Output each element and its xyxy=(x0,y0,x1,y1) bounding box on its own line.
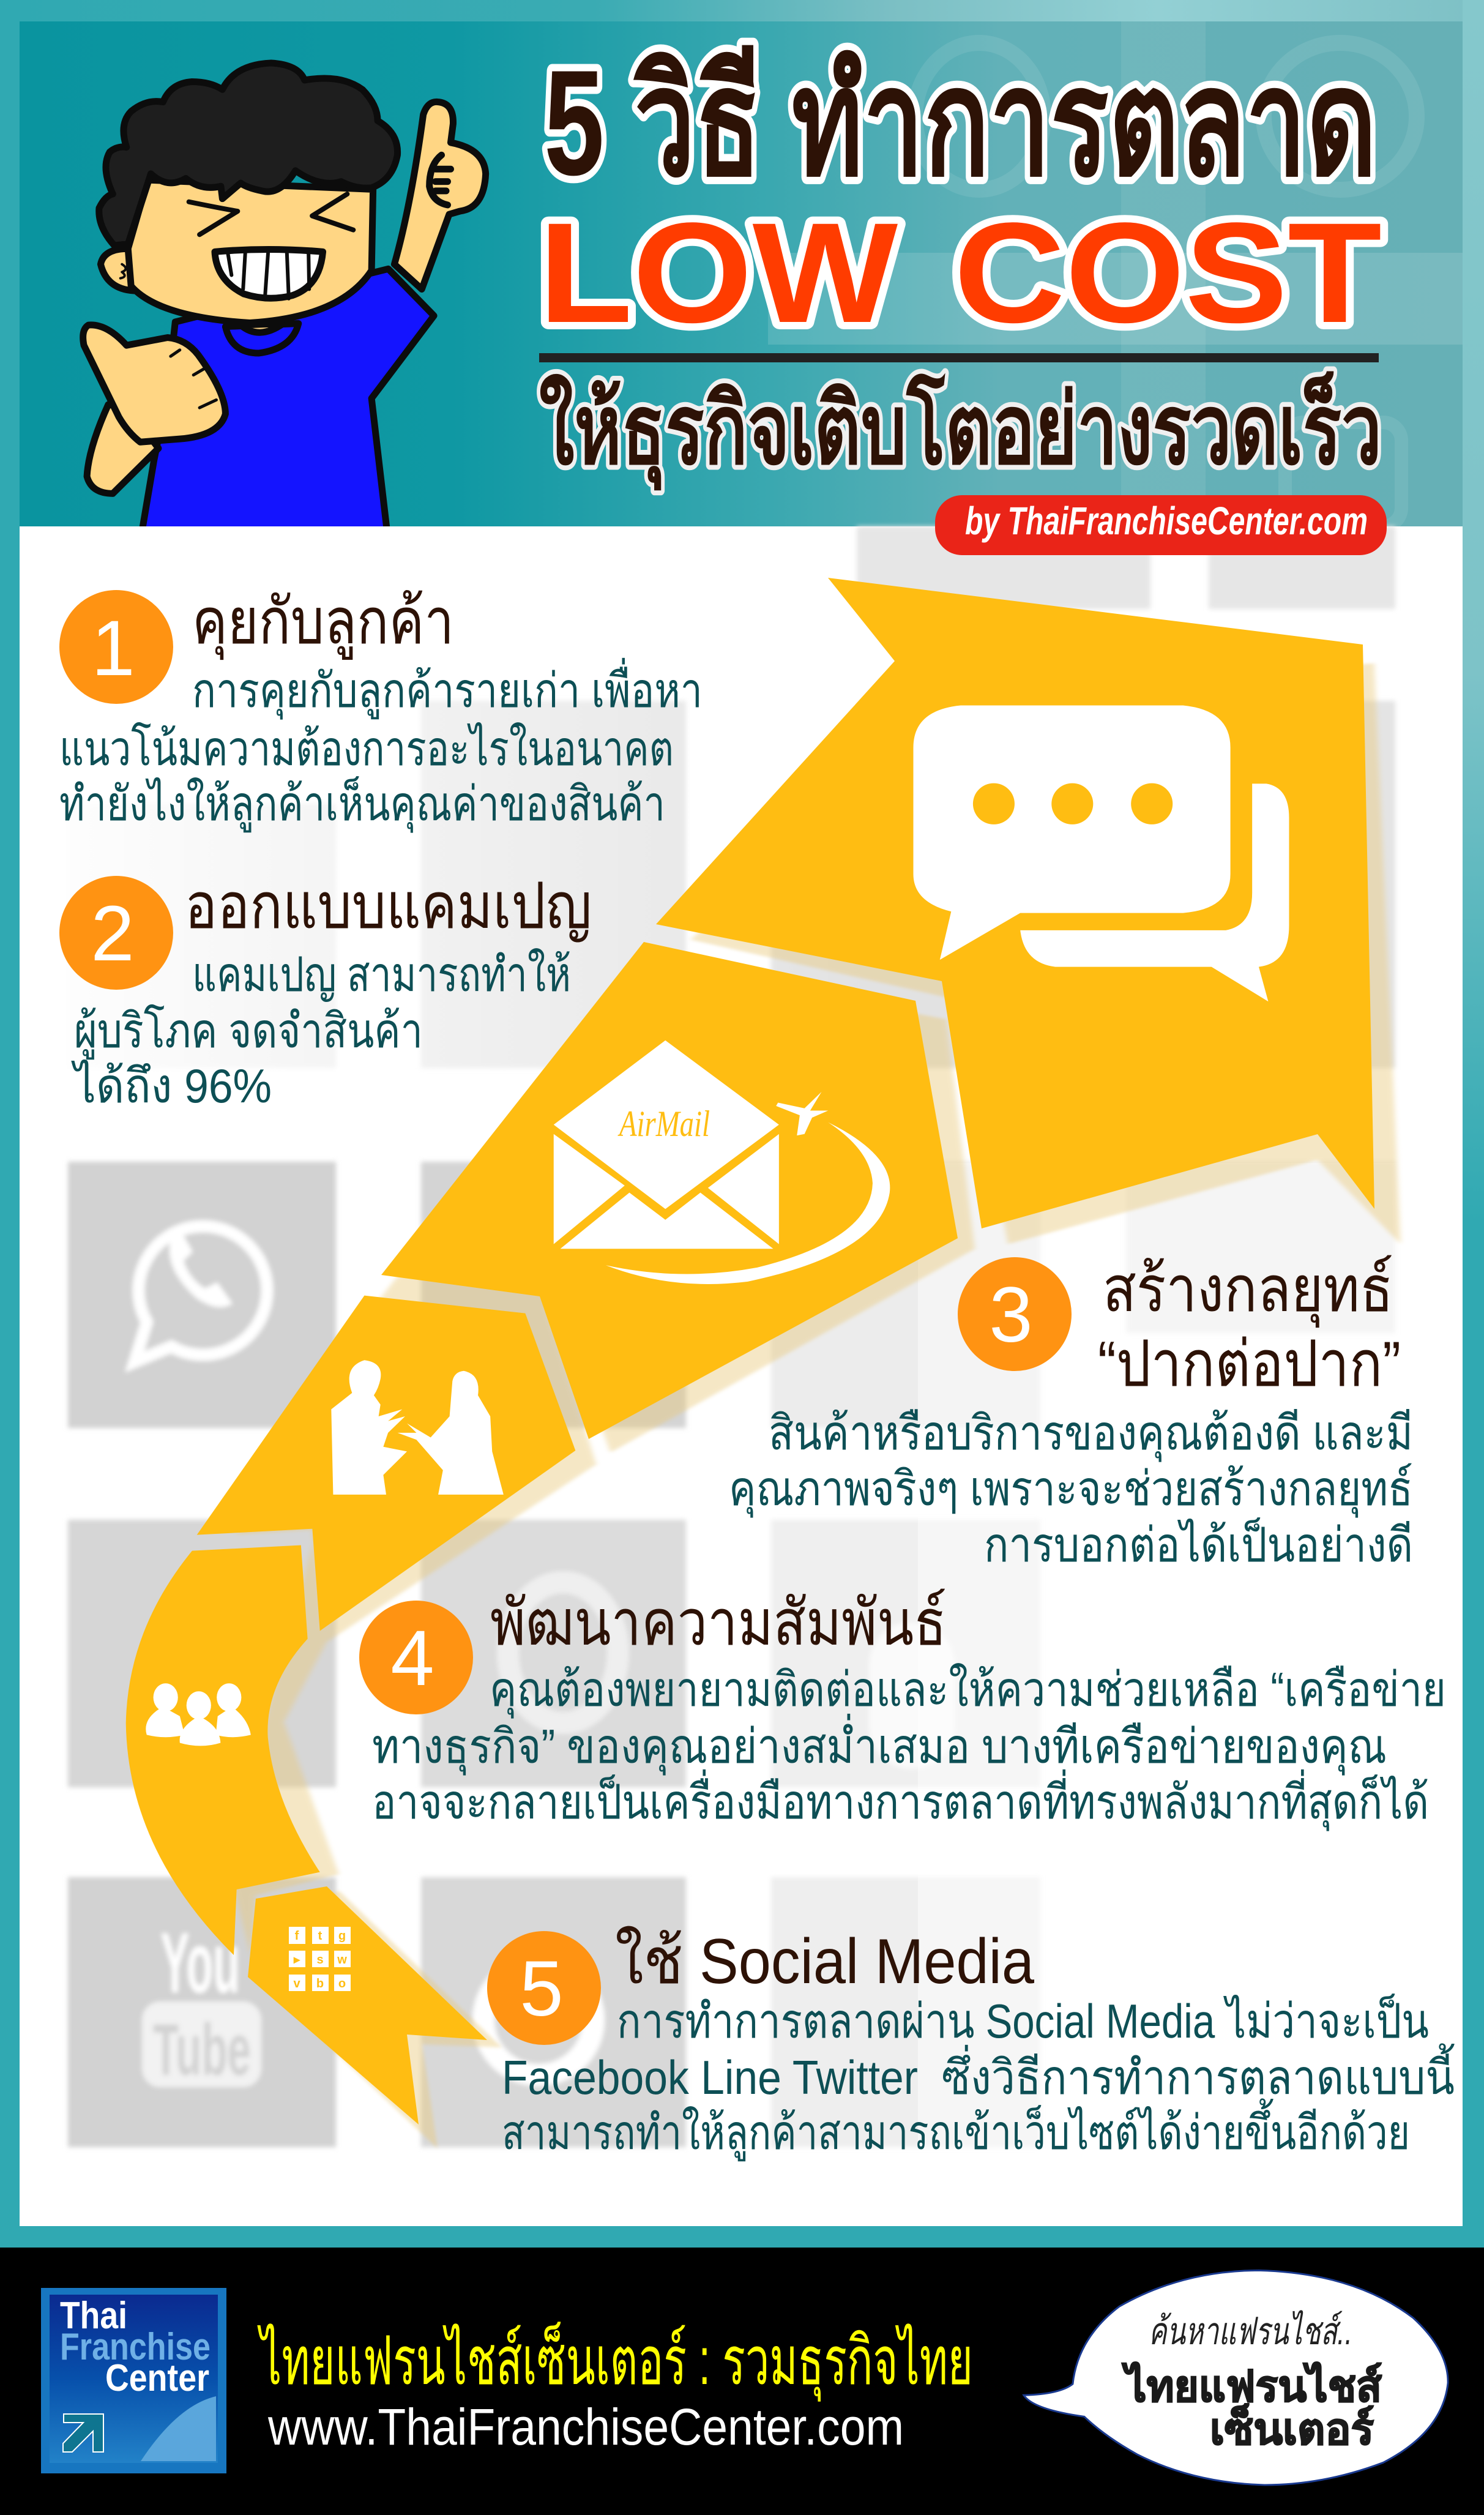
number badge 1 xyxy=(59,590,173,704)
arrow segment 5: social xyxy=(248,1886,487,2124)
hair xyxy=(99,63,398,245)
footer name: ไทยแฟรนไชส์เซ็นเตอร์ : รวมธุรกิจไทย xyxy=(257,2321,973,2402)
step 5 xyxy=(487,1926,1455,2161)
arrow shadow tail xyxy=(269,1891,502,2148)
icon: ghost youtube: You xyxy=(160,1915,240,2011)
face xyxy=(128,180,373,323)
step 2 xyxy=(59,871,592,1113)
blue shirt xyxy=(140,269,434,542)
title divider xyxy=(539,353,1379,362)
heading 4: พัฒนาความสัมพันธ์ xyxy=(490,1588,947,1659)
mouth xyxy=(215,249,323,299)
speech bubble xyxy=(1024,2270,1448,2485)
heading 2: ออกแบบแคมเปญ xyxy=(185,871,592,943)
eyes xyxy=(189,194,353,234)
shirt collar xyxy=(225,324,299,353)
number badge 3 xyxy=(958,1257,1072,1371)
number badge 2 xyxy=(59,876,173,990)
icon: ghost youtube xyxy=(142,1915,261,2091)
byline pill xyxy=(935,495,1387,555)
body 2: แคมเปญ สามารถทำให้ xyxy=(192,947,571,1002)
heading 3: “ปากต่อปาก” xyxy=(1098,1329,1401,1400)
body 2 xyxy=(71,947,571,1113)
icon: ghost youtube: Tube xyxy=(153,2009,251,2091)
icon: social media grid: w xyxy=(337,1953,347,1967)
number badge 2: 2 xyxy=(91,890,135,977)
icon: social media grid xyxy=(289,1927,351,1991)
icon: social media grid: f xyxy=(295,1929,299,1943)
body 2: ผู้บริโภค จดจำสินค้า xyxy=(74,1004,423,1059)
panel: header background xyxy=(20,21,1463,526)
bubble brand: เซ็นเตอร์ xyxy=(1210,2403,1374,2453)
bubble tagline: ค้นหาแฟรนไชส์.. xyxy=(1149,2310,1352,2353)
logo wordmark xyxy=(60,2295,211,2399)
icon: group of people xyxy=(146,1683,251,1746)
body 1: แนวโน้มความต้องการอะไรในอนาคต xyxy=(59,722,674,775)
heading 3 xyxy=(1098,1254,1401,1400)
body 1: การคุยกับลูกค้ารายเก่า เพื่อหา xyxy=(192,658,703,720)
arrow segment 4: group xyxy=(126,1545,320,1955)
heading 1: คุยกับลูกค้า xyxy=(192,586,454,660)
step 4 xyxy=(359,1588,1446,1831)
icon: social media grid: ▸ xyxy=(293,1953,300,1967)
icon: social media grid: g xyxy=(338,1929,346,1943)
icon: airmail envelope xyxy=(554,1041,890,1284)
step 3 xyxy=(729,1254,1413,1572)
number badge 5: 5 xyxy=(520,1945,564,2033)
body 2: ได้ถึง 96% xyxy=(71,1059,272,1113)
arrow segment 3: conversation xyxy=(197,1296,575,1631)
frame top band xyxy=(0,0,1484,21)
bubble brand: ไทยแฟรนไชส์ xyxy=(1121,2361,1382,2410)
logo wordmark: Thai xyxy=(60,2295,127,2337)
arrow shadows xyxy=(227,663,1401,1956)
number badge 4 xyxy=(359,1601,473,1714)
airmail label: AirMail xyxy=(617,1104,710,1144)
bubble brand xyxy=(1121,2361,1382,2453)
logo wordmark: Center xyxy=(105,2357,209,2399)
heading 3: สร้างกลยุทธ์ xyxy=(1103,1254,1393,1328)
panel: cartoon mascot xyxy=(83,63,486,542)
arrow segment 1: chat xyxy=(656,578,1374,1228)
title xyxy=(539,39,1382,491)
number badge 4: 4 xyxy=(390,1615,434,1702)
raised arm and thumb xyxy=(394,102,486,289)
number badge 1: 1 xyxy=(91,605,135,692)
step 1 xyxy=(59,586,703,833)
icon: two people talking xyxy=(331,1360,504,1495)
panel: white content area xyxy=(20,526,1463,2226)
arrow segment 2: mail xyxy=(381,942,958,1439)
title line 2: LOW COST xyxy=(539,193,1382,353)
icon: social media grid: b xyxy=(316,1977,324,1990)
footer band xyxy=(0,2248,1484,2515)
footer logo xyxy=(41,2288,226,2473)
icon: chat bubbles xyxy=(913,706,1289,1001)
body 1 xyxy=(59,658,703,833)
icon: ghost whatsapp xyxy=(135,1226,267,1362)
icon: social media grid: s xyxy=(316,1953,324,1967)
icon: social media grid: o xyxy=(338,1977,346,1990)
icon: social media grid: v xyxy=(293,1977,300,1990)
body 1: ทำยังไงให้ลูกค้าเห็นคุณค่าของสินค้า xyxy=(59,776,665,833)
number badge 5 xyxy=(487,1931,601,2045)
icon: social media grid: t xyxy=(318,1929,323,1943)
body 3 xyxy=(729,1406,1413,1572)
heading 5: ใช้ Social Media xyxy=(615,1926,1034,1997)
number badge 3: 3 xyxy=(989,1271,1033,1359)
frame right band xyxy=(1463,0,1484,1224)
footer url: www.ThaiFranchiseCenter.com xyxy=(267,2398,904,2456)
icon: logo arrow xyxy=(63,2414,103,2452)
ear xyxy=(100,249,134,291)
body 3: การบอกต่อได้เป็นอย่างดี xyxy=(984,1517,1413,1572)
body 4 xyxy=(372,1662,1446,1831)
body 5 xyxy=(502,1994,1455,2161)
logo wordmark: Franchise xyxy=(60,2326,211,2368)
left hand xyxy=(83,325,225,493)
